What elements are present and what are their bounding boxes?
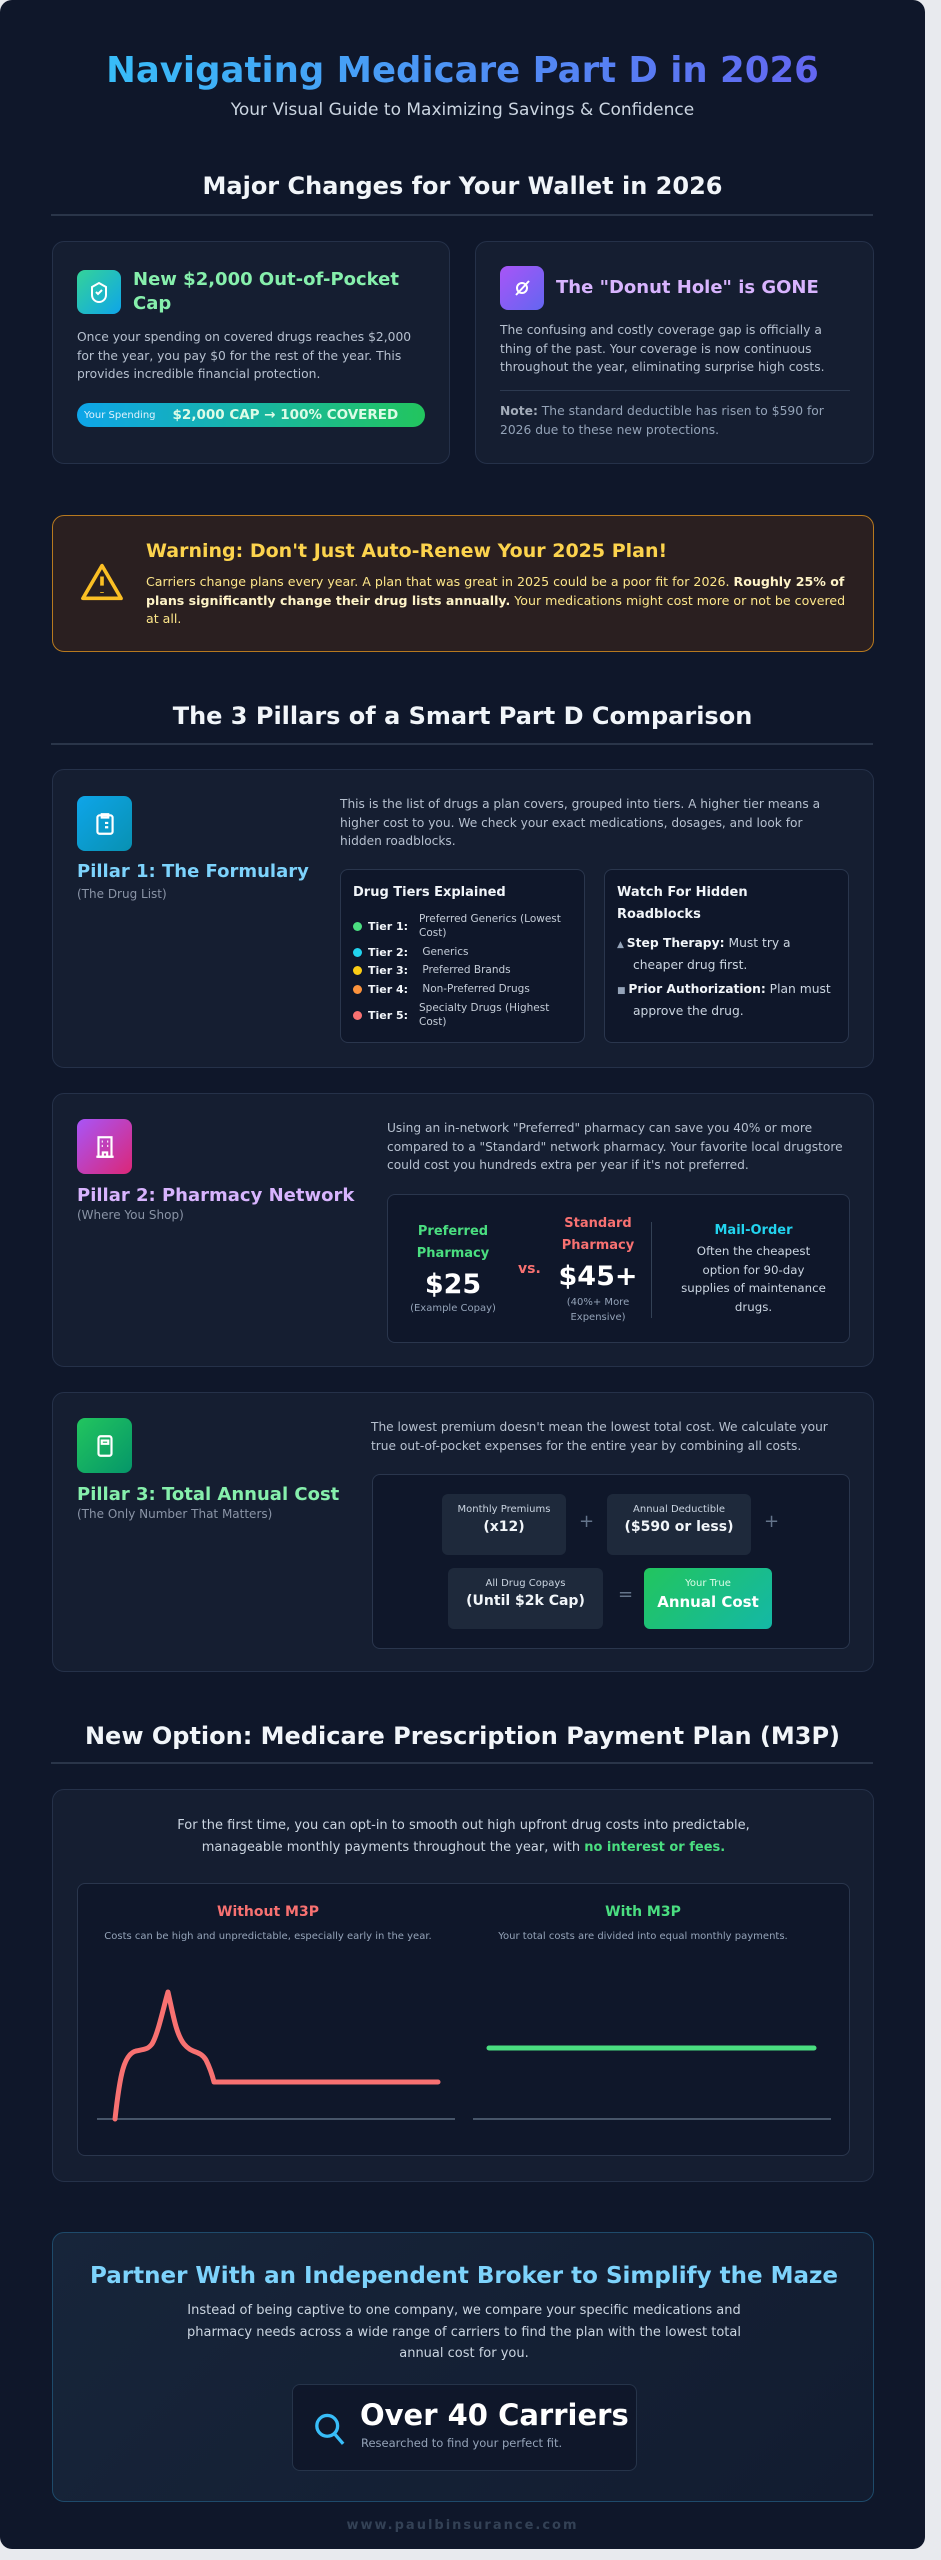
drug tiers box: Preferred Brands bbox=[422, 964, 511, 976]
pillar 2 title: Pillar 2: Pharmacy Network bbox=[77, 1185, 354, 1206]
chart: lines bbox=[97, 1990, 831, 2122]
formula box: = bbox=[618, 1584, 633, 1605]
icon: clipboard bbox=[77, 796, 132, 851]
formula box: (x12) bbox=[483, 1519, 525, 1535]
standard: Standard Pharmacy bbox=[562, 1216, 634, 1253]
roadblocks box: ■ Prior Authorization: Plan must approve the drug. bbox=[617, 982, 831, 1018]
icon: warning triangle bbox=[81, 564, 123, 600]
warning heading: Warning: Don't Just Auto-Renew Your 2025 Plan! bbox=[146, 540, 667, 562]
stat box: carriers: Researched to find your perfect fit. bbox=[361, 2436, 562, 2450]
drug tiers box: Non-Preferred Drugs bbox=[422, 983, 530, 995]
warning text: Carriers change plans every year. A plan that was great in 2025 could be a poor fit for 2026. Roughly 25% of plans significantly change their drug lists annually. Your medications might cost more or not be covered at all. bbox=[146, 574, 845, 626]
icon: crossed pill bbox=[500, 266, 544, 310]
formula box bbox=[372, 1474, 850, 1649]
stat box: carriers bbox=[292, 2384, 637, 2471]
roadblocks box bbox=[604, 869, 849, 1043]
panel: partner with broker bbox=[52, 2232, 874, 2502]
result: Your True bbox=[685, 1578, 731, 1589]
comparison box: $25 bbox=[425, 1269, 481, 1300]
note: Note: The standard deductible has risen to $590 for 2026 due to these new protections. bbox=[500, 404, 824, 436]
body text: Once your spending on covered drugs reaches $2,000 for the year, you pay $0 for the rest of the year. This provides incredible financial protection. bbox=[77, 330, 411, 381]
icon: building bbox=[77, 1119, 132, 1174]
formula box: All Drug Copays bbox=[486, 1578, 565, 1589]
body text: The confusing and costly coverage gap is officially a thing of the past. Your coverage is now continuous throughout the year, eliminating surprise high costs. bbox=[500, 323, 825, 374]
preferred: Preferred Pharmacy bbox=[417, 1224, 489, 1261]
heading: Partner With an Independent Broker to Simplify the Maze bbox=[90, 2263, 838, 2289]
comparison box bbox=[387, 1194, 850, 1343]
result bbox=[644, 1568, 772, 1629]
heading: major changes: Major Changes for Your Wallet in 2026 bbox=[203, 172, 722, 200]
formula box: Monthly Premiums bbox=[458, 1504, 550, 1515]
pillar 1 title: Pillar 1: The Formulary bbox=[77, 861, 309, 882]
panel: pillar 2 bbox=[52, 1093, 874, 1367]
description: For the first time, you can opt-in to smooth out high upfront drug costs into predictable, manageable monthly payments throughout the year, with no interest or fees. bbox=[177, 1818, 750, 1855]
body text: Instead of being captive to one company, we compare your specific medications and pharmacy needs across a wide range of carriers to find the plan with the lowest total annual cost for you. bbox=[187, 2303, 741, 2361]
chart comparison: Your total costs are divided into equal monthly payments. bbox=[498, 1931, 788, 1942]
vs: vs. bbox=[518, 1261, 541, 1277]
progress bar bbox=[77, 403, 425, 427]
comparison box: (40%+ More Expensive) bbox=[567, 1297, 629, 1323]
callout: warning bbox=[52, 515, 874, 652]
formula box: ($590 or less) bbox=[624, 1519, 734, 1535]
panel: pillar 1: (The Drug List) bbox=[77, 887, 167, 901]
heading: The "Donut Hole" is GONE bbox=[556, 277, 819, 298]
drug tiers box: Tier 5: bbox=[368, 1009, 408, 1022]
panel: pillar 1 bbox=[52, 769, 874, 1068]
drug tiers box bbox=[340, 869, 585, 1043]
title: Navigating Medicare Part D in 2026 bbox=[106, 50, 819, 91]
description: This is the list of drugs a plan covers, grouped into tiers. A higher tier means a higher cost to you. We check your exact medications, dosages, and look for hidden roadblocks. bbox=[340, 797, 820, 848]
mail order: Mail-Order bbox=[714, 1223, 792, 1238]
chart comparison: Costs can be high and unpredictable, especially early in the year. bbox=[104, 1931, 432, 1942]
heading: 3 pillars: The 3 Pillars of a Smart Part D Comparison bbox=[173, 702, 752, 730]
result: Annual Cost bbox=[657, 1593, 759, 1611]
icon: calculator bbox=[77, 1418, 132, 1473]
drug tiers box: Preferred Generics (Lowest Cost) bbox=[419, 913, 561, 938]
panel: pillar 3: (The Only Number That Matters) bbox=[77, 1507, 272, 1521]
panel: $2000 cap bbox=[52, 241, 450, 464]
drug tiers box: Tier 2: bbox=[368, 946, 408, 959]
formula box: + bbox=[764, 1511, 779, 1532]
drug tiers box: Specialty Drugs (Highest Cost) bbox=[419, 1002, 549, 1028]
roadblocks box: ▲ Step Therapy: Must try a cheaper drug first. bbox=[617, 936, 791, 972]
heading: M3P: New Option: Medicare Prescription Payment Plan (M3P) bbox=[85, 1722, 840, 1750]
comparison box: Often the cheapest option for 90-day supplies of maintenance drugs. bbox=[681, 1244, 826, 1314]
panel: donut hole bbox=[475, 241, 874, 464]
heading: New $2,000 Out-of-Pocket Cap bbox=[133, 269, 399, 314]
icon: magnifier bbox=[315, 2414, 344, 2445]
progress bar: $2,000 CAP → 100% COVERED bbox=[173, 407, 398, 423]
subtitle: Your Visual Guide to Maximizing Savings & Confidence bbox=[231, 100, 694, 120]
description: Using an in-network "Preferred" pharmacy can save you 40% or more compared to a "Standard" network pharmacy. Your favorite local drugstore could cost you hundreds extra per year if it's not preferred. bbox=[387, 1121, 843, 1172]
panel: M3P bbox=[52, 1789, 874, 2182]
with M3P label: With M3P bbox=[605, 1904, 681, 1920]
icon: shield check bbox=[77, 270, 121, 314]
without M3P label: Without M3P bbox=[217, 1904, 319, 1920]
pillar 3 title: Pillar 3: Total Annual Cost bbox=[77, 1484, 339, 1505]
drug tiers box: Tier 3: bbox=[368, 964, 408, 977]
formula box: Annual Deductible bbox=[633, 1504, 725, 1515]
comparison box: $45+ bbox=[558, 1261, 637, 1292]
panel: pillar 2: (Where You Shop) bbox=[77, 1208, 184, 1222]
comparison box: (Example Copay) bbox=[410, 1303, 496, 1314]
chart comparison bbox=[77, 1883, 850, 2156]
panel: pillar 3 bbox=[52, 1392, 874, 1672]
footer: www.paulbinsurance.com bbox=[346, 2518, 579, 2533]
formula box: + bbox=[579, 1511, 594, 1532]
drug tiers box: Generics bbox=[422, 946, 469, 958]
drug tiers box: Tier 1: bbox=[368, 920, 408, 933]
stat box: carriers: Over 40 Carriers bbox=[360, 2398, 629, 2432]
roadblocks box: Watch For Hidden Roadblocks bbox=[617, 885, 748, 922]
description: The lowest premium doesn't mean the lowest total cost. We calculate your true out-of-pocket expenses for the entire year by combining all costs. bbox=[371, 1420, 828, 1452]
formula box: (Until $2k Cap) bbox=[466, 1593, 585, 1609]
drug tiers box: Drug Tiers Explained bbox=[353, 885, 506, 900]
progress bar: Your Spending bbox=[84, 410, 156, 420]
drug tiers box: Tier 4: bbox=[368, 983, 408, 996]
